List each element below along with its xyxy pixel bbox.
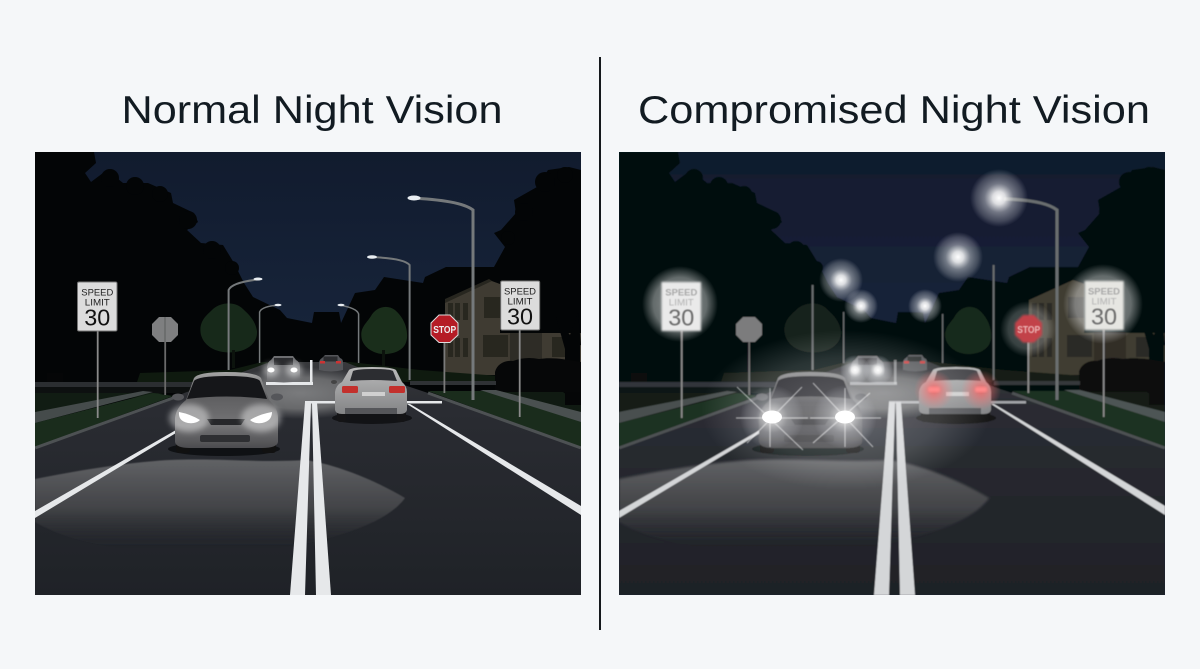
right tree trunk and branches	[560, 333, 581, 362]
lit intersection	[840, 369, 930, 418]
lane markings	[35, 360, 581, 595]
oncoming headlight star glare	[736, 383, 881, 450]
glowing stop sign: STOP	[1017, 324, 1040, 336]
glowing speed limit sign right: SPEED	[1088, 286, 1121, 296]
speed limit sign right: 30	[507, 304, 533, 330]
glowing speed limit sign left: LIMIT	[669, 298, 694, 308]
near car red tail light glare	[914, 370, 1001, 410]
glowing speed limit sign left: SPEED	[665, 288, 698, 298]
tree line silhouette	[619, 152, 1165, 416]
bush	[1079, 358, 1165, 392]
glowing speed limit sign left	[642, 266, 718, 342]
headlight pool on the road	[619, 458, 989, 530]
tree line silhouette	[35, 152, 581, 470]
road surface	[35, 362, 581, 595]
house	[1029, 280, 1165, 375]
curbs	[35, 393, 581, 448]
heading: Normal Night Vision: Normal Night Vision	[122, 89, 503, 132]
far car rear	[319, 355, 343, 372]
center divider line	[599, 57, 601, 630]
lawns and ground	[137, 362, 495, 382]
house	[445, 279, 581, 375]
speed limit sign left: LIMIT	[85, 298, 110, 308]
speed limit sign right	[501, 281, 540, 417]
curbs	[619, 393, 1165, 448]
oncoming far car	[851, 356, 884, 382]
stop sign	[431, 315, 458, 393]
cross street and sidewalks	[619, 381, 1165, 447]
glowing speed limit sign right	[1063, 264, 1143, 344]
bush	[495, 358, 581, 382]
panel: compromised night vision street scene	[614, 147, 1170, 600]
street lights	[229, 196, 473, 400]
night sky	[614, 147, 1170, 600]
far car headlight glare	[840, 355, 893, 385]
green trees	[200, 303, 407, 368]
low haze around traffic	[701, 330, 991, 490]
speed limit sign left	[78, 282, 117, 418]
far car rear	[903, 355, 927, 372]
lane markings	[619, 360, 1165, 595]
green trees	[784, 303, 991, 354]
oncoming car with headlights	[168, 372, 283, 456]
cross street and sidewalks	[35, 381, 581, 447]
glowing speed limit sign left: 30	[668, 304, 694, 330]
night sky	[85, 152, 581, 323]
back of stop sign	[152, 317, 178, 395]
speed limit sign left: SPEED	[81, 288, 114, 298]
sign posts	[681, 330, 1105, 418]
back of stop sign	[736, 317, 762, 395]
panel: normal night vision street scene	[35, 152, 581, 595]
street light halos	[819, 169, 1028, 323]
near car rear view	[331, 367, 412, 424]
lawns and ground	[631, 361, 1080, 382]
glowing speed limit sign right: 30	[1091, 304, 1117, 330]
street light poles	[813, 199, 1057, 400]
speed limit sign left: 30	[84, 304, 110, 330]
oncoming far car	[263, 356, 302, 382]
stop sign: STOP	[433, 324, 456, 336]
near car rear view	[916, 367, 996, 424]
headlight pool on the road	[35, 459, 405, 530]
lit intersection	[252, 369, 346, 418]
road surface	[619, 362, 1165, 595]
right tree trunk and branches	[1144, 332, 1165, 362]
speed limit sign right: LIMIT	[508, 296, 533, 306]
glowing speed limit sign right: LIMIT	[1092, 296, 1117, 306]
heading: Compromised Night Vision: Compromised Night Vision	[638, 89, 1150, 132]
blurred base scene	[614, 147, 1170, 600]
speed limit sign right: SPEED	[504, 286, 537, 296]
oncoming car	[752, 372, 867, 456]
glowing stop sign	[1000, 301, 1056, 357]
